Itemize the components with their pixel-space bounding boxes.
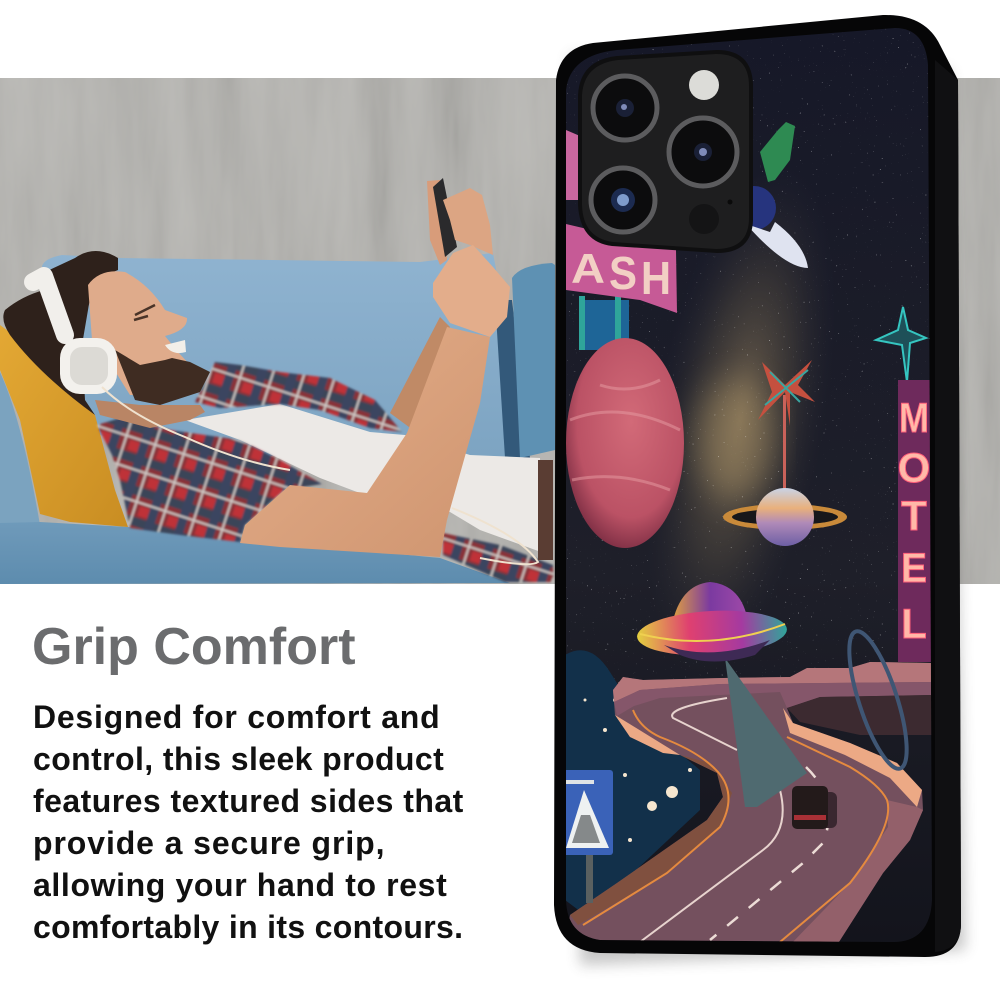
plaid shirt hem bbox=[443, 533, 553, 582]
microphone bbox=[728, 200, 732, 204]
phone in hand bbox=[433, 178, 457, 257]
body text bbox=[33, 699, 464, 945]
orange edge lines bbox=[583, 710, 888, 942]
motel sign: O bbox=[898, 444, 930, 491]
body text: features textured sides that bbox=[33, 783, 464, 819]
neck bbox=[95, 400, 205, 428]
far arm bbox=[390, 317, 450, 430]
heading: Grip Comfort bbox=[32, 618, 356, 676]
t-shirt bbox=[185, 404, 541, 552]
body text: Designed for comfort and bbox=[33, 699, 440, 735]
cavern wall bbox=[787, 695, 935, 735]
back cushion bbox=[42, 253, 510, 458]
phone artwork bbox=[560, 20, 935, 945]
body text: control, this sleek product bbox=[33, 741, 444, 777]
motel sign: L bbox=[901, 600, 927, 647]
beard bbox=[115, 350, 210, 405]
CASH sign: A bbox=[571, 245, 605, 292]
saturn bbox=[723, 488, 847, 546]
peach edge left bbox=[615, 715, 680, 755]
front hand bbox=[433, 245, 510, 337]
plaid collar bbox=[195, 362, 402, 432]
CASH sign: S bbox=[609, 247, 637, 299]
CASH sign: H bbox=[641, 252, 671, 304]
phone case body bbox=[554, 15, 961, 957]
man lying on sofa bbox=[3, 178, 553, 582]
camera lens top-left bbox=[593, 76, 657, 140]
forearm and upper arm bbox=[240, 327, 490, 557]
brown embankment left bbox=[570, 755, 732, 925]
seat bbox=[0, 522, 510, 584]
ringed blue planet bbox=[752, 186, 808, 268]
camera lens bottom-left bbox=[591, 168, 655, 232]
pinwheel on pole bbox=[758, 360, 815, 490]
white centre lines bbox=[640, 790, 783, 942]
smile bbox=[165, 340, 186, 353]
eye shading bbox=[134, 305, 155, 320]
peach edge right bbox=[783, 708, 922, 807]
ring portal bbox=[847, 629, 909, 771]
motel sign: E bbox=[901, 544, 927, 591]
camera lens right bbox=[669, 118, 737, 186]
ear cup bbox=[60, 338, 117, 394]
rock rim and road base bbox=[565, 662, 935, 945]
left arm bbox=[0, 372, 40, 525]
fingers bbox=[443, 188, 493, 255]
right cushion bbox=[512, 263, 555, 458]
rocket top bbox=[760, 122, 795, 182]
cord bbox=[102, 387, 538, 564]
car bbox=[792, 786, 837, 829]
headband bbox=[33, 276, 65, 335]
road landscape bbox=[565, 662, 935, 945]
star sign bbox=[876, 307, 926, 382]
body text: comfortably in its contours. bbox=[33, 909, 463, 945]
road sign bbox=[566, 770, 613, 903]
camera module bbox=[578, 50, 753, 253]
blue nebula bbox=[565, 650, 700, 915]
large pink planet bbox=[566, 338, 684, 548]
milky way bbox=[668, 218, 814, 598]
phone shadow bbox=[570, 55, 965, 965]
motel sign bbox=[898, 380, 931, 662]
brown embankment right bbox=[790, 800, 923, 945]
ufo bbox=[636, 582, 807, 807]
face bbox=[88, 271, 190, 395]
belt area bbox=[538, 460, 553, 560]
flash bbox=[689, 70, 719, 100]
yellow pillow bbox=[0, 325, 128, 527]
hair bbox=[3, 251, 118, 415]
sensor bbox=[689, 204, 719, 234]
sofa bbox=[0, 253, 555, 584]
rim band bbox=[614, 682, 935, 716]
star field bbox=[560, 20, 935, 700]
dark gap bbox=[495, 300, 530, 458]
body text: allowing your hand to rest bbox=[33, 867, 447, 903]
photo background: concrete wall bbox=[0, 78, 1000, 584]
motel sign: M bbox=[899, 394, 929, 441]
motel sign: T bbox=[901, 492, 927, 539]
body text: provide a secure grip, bbox=[33, 825, 385, 861]
plaid sleeve bbox=[97, 418, 322, 542]
CASH sign bbox=[566, 130, 677, 350]
dashed lane bbox=[710, 767, 829, 940]
space background bbox=[560, 20, 935, 945]
hand holding phone bbox=[427, 180, 447, 265]
rim top bbox=[613, 662, 935, 702]
